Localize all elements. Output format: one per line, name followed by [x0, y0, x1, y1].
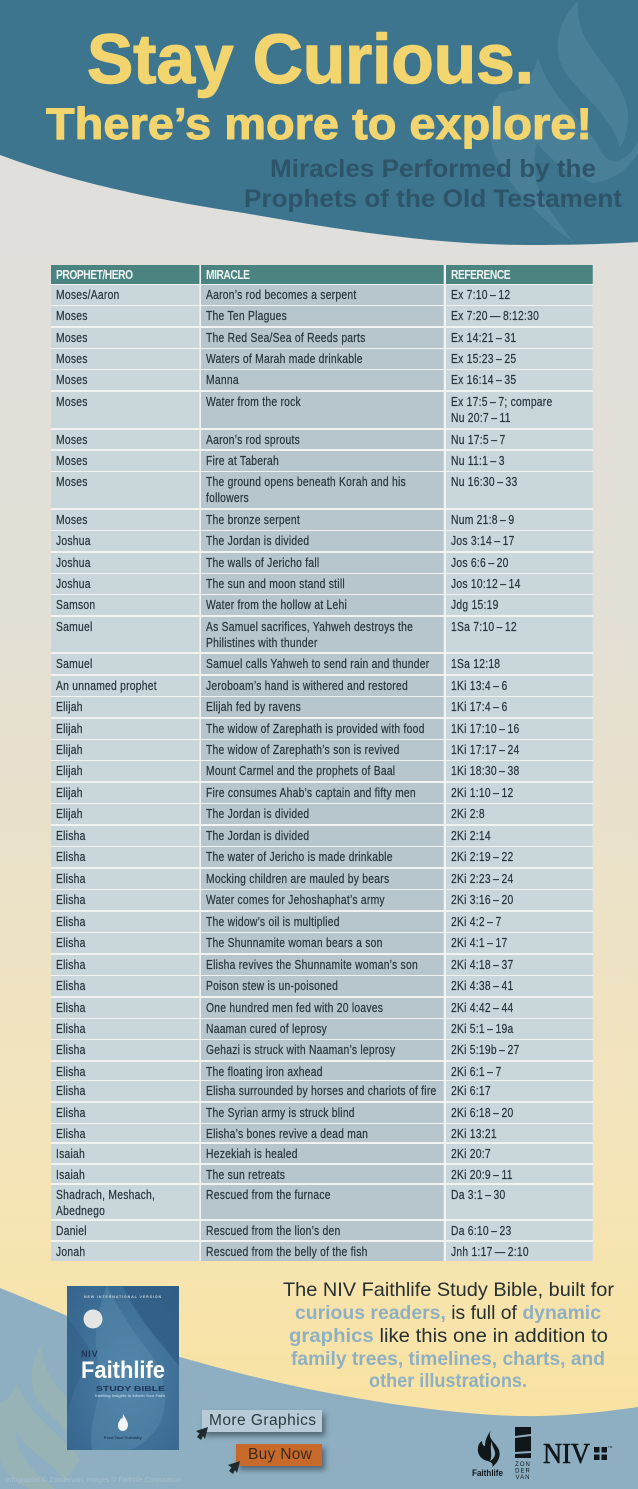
row 11: The Jordan is divided	[206, 534, 309, 548]
row 27: Elisha	[56, 893, 86, 907]
row 33: 2Ki 5:1 – 19a	[451, 1022, 513, 1036]
row 9: The ground opens beneath Korah and his	[206, 475, 406, 489]
row 39: 2Ki 20:7	[451, 1147, 491, 1161]
row 2: Moses	[56, 309, 88, 323]
Zondervan wordmark: ZON	[515, 1462, 531, 1468]
row 13: Jos 10:12 – 14	[451, 577, 521, 591]
row 34: Elisha	[56, 1043, 86, 1057]
seal	[84, 1310, 102, 1328]
row 12	[51, 553, 593, 573]
row 15	[51, 617, 593, 652]
row 17	[51, 676, 593, 696]
book flame	[118, 1414, 128, 1431]
row 15: Philistines with thunder	[206, 636, 318, 650]
title	[46, 20, 623, 213]
row 15: As Samuel sacrifices, Yahweh destroys the	[206, 620, 413, 634]
title: Miracles Performed by the	[270, 155, 596, 183]
publisher logos	[470, 1425, 638, 1485]
row 25: Elisha	[56, 850, 86, 864]
row 38	[51, 1124, 593, 1142]
icon: cursor arrows	[194, 1425, 244, 1477]
row 10: The bronze serpent	[206, 513, 300, 527]
row 41: Rescued from the furnace	[206, 1188, 331, 1202]
row 30: Elisha revives the Shunnamite woman’s son	[206, 958, 418, 972]
row 5: Manna	[206, 373, 239, 387]
book cover	[67, 1286, 179, 1450]
row 34: 2Ki 5:19b – 27	[451, 1043, 519, 1057]
row 38: 2Ki 13:21	[451, 1127, 497, 1141]
row 19	[51, 719, 593, 739]
row 32: Elisha	[56, 1001, 86, 1015]
row 14: Samson	[56, 598, 95, 612]
row 28: Elisha	[56, 915, 86, 929]
row 19: Elijah	[56, 722, 83, 736]
row 43: Jnh 1:17 — 2:10	[451, 1245, 529, 1259]
row 39	[51, 1144, 593, 1163]
promotional text: other illustrations.	[369, 1370, 527, 1392]
row 5	[51, 370, 593, 390]
row 4: Moses	[56, 352, 88, 366]
row 4: Waters of Marah made drinkable	[206, 352, 363, 366]
table header: PROPHET/HERO	[56, 268, 133, 282]
book cover: Faithlife	[81, 1357, 165, 1384]
row 16	[51, 654, 593, 674]
row 2	[51, 306, 593, 326]
row 7: Moses	[56, 433, 88, 447]
row 21: Mount Carmel and the prophets of Baal	[206, 764, 395, 778]
more graphics button: More Graphics	[209, 1412, 316, 1429]
publisher logos: VAN	[516, 1475, 530, 1481]
row 25: The water of Jericho is made drinkable	[206, 850, 393, 864]
row 20	[51, 740, 593, 760]
row 37: The Syrian army is struck blind	[206, 1106, 355, 1120]
row 6	[51, 392, 593, 428]
row 39: Isaiah	[56, 1147, 85, 1161]
row 35: The floating iron axhead	[206, 1065, 323, 1079]
more graphics button	[202, 1410, 322, 1432]
row 24: 2Ki 2:14	[451, 829, 491, 843]
title: Stay Curious.	[87, 20, 534, 98]
row 12: Jos 6:6 – 20	[451, 556, 509, 570]
row 16: Samuel	[56, 657, 92, 671]
row 19: The widow of Zarephath is provided with food	[206, 722, 425, 736]
row 35	[51, 1062, 593, 1080]
row 2: The Ten Plagues	[206, 309, 287, 323]
row 41: Abednego	[56, 1204, 105, 1218]
row 35: Elisha	[56, 1065, 86, 1079]
row 10: Moses	[56, 513, 88, 527]
row 12: The walls of Jericho fall	[206, 556, 319, 570]
title: There’s more to explore!	[46, 100, 592, 149]
icon: Faithlife flame	[478, 1430, 500, 1467]
promotional text	[270, 1275, 638, 1395]
row 36: Elisha	[56, 1084, 86, 1098]
row 32: One hundred men fed with 20 loaves	[206, 1001, 383, 1015]
row 11: Joshua	[56, 534, 91, 548]
row 7: Nu 17:5 – 7	[451, 433, 506, 447]
row 37	[51, 1103, 593, 1123]
row 24: Elisha	[56, 829, 86, 843]
row 23: 2Ki 2:8	[451, 807, 485, 821]
book cover: STUDY BIBLE	[96, 1384, 165, 1393]
row 10	[51, 510, 593, 530]
row 37: Elisha	[56, 1106, 86, 1120]
row 9: followers	[206, 491, 249, 505]
row 17: Jeroboam’s hand is withered and restored	[206, 679, 408, 693]
row 26: Elisha	[56, 872, 86, 886]
publisher logos: DER	[515, 1468, 531, 1474]
row 20: Elijah	[56, 743, 83, 757]
row 28: 2Ki 4:2 – 7	[451, 915, 501, 929]
icon: Zondervan block	[515, 1427, 531, 1458]
row 6: Water from the rock	[206, 395, 301, 409]
row 40: 2Ki 20:9 – 11	[451, 1168, 513, 1182]
row 24	[51, 826, 593, 846]
row 5: Moses	[56, 373, 88, 387]
row 36: Elisha surrounded by horses and chariots of fire	[206, 1084, 437, 1098]
row 28: The widow’s oil is multiplied	[206, 915, 340, 929]
row 29: Elisha	[56, 936, 86, 950]
table header: REFERENCE	[451, 268, 510, 282]
row 40	[51, 1165, 593, 1183]
row 18: 1Ki 17:4 – 6	[451, 700, 507, 714]
promotional text: The NIV Faithlife Study Bible, built for	[283, 1279, 615, 1301]
book cover: NIV	[81, 1349, 98, 1359]
row 23: The Jordan is divided	[206, 807, 309, 821]
row 5: Ex 16:14 – 35	[451, 373, 516, 387]
row 22: 2Ki 1:10 – 12	[451, 786, 513, 800]
row 17: An unnamed prophet	[56, 679, 157, 693]
row 16: Samuel calls Yahweh to send rain and thunder	[206, 657, 429, 671]
row 42: Daniel	[56, 1224, 87, 1238]
row 3: Moses	[56, 331, 88, 345]
row 3: The Red Sea/Sea of Reeds parts	[206, 331, 366, 345]
row 13: Joshua	[56, 577, 91, 591]
row 13: The sun and moon stand still	[206, 577, 345, 591]
row 26	[51, 869, 593, 889]
row 15: Samuel	[56, 620, 92, 634]
row 31	[51, 976, 593, 996]
row 1: Aaron’s rod becomes a serpent	[206, 288, 356, 302]
row 12: Joshua	[56, 556, 91, 570]
row 9: Moses	[56, 475, 88, 489]
row 13	[51, 574, 593, 594]
book cover: Instilling Insights to Inform Your Faith	[95, 1394, 165, 1398]
row 28	[51, 912, 593, 932]
row 26: 2Ki 2:23 – 24	[451, 872, 513, 886]
row 8	[51, 451, 593, 471]
row 1: Ex 7:10 – 12	[451, 288, 510, 302]
table header: MIRACLE	[206, 268, 250, 282]
row 7	[51, 430, 593, 449]
row 22: Fire consumes Ahab’s captain and fifty men	[206, 786, 416, 800]
table header	[51, 265, 593, 284]
row 23	[51, 804, 593, 824]
row 3: Ex 14:21 – 31	[451, 331, 516, 345]
row 7: Aaron’s rod sprouts	[206, 433, 300, 447]
row 20: The widow of Zarephath’s son is revived	[206, 743, 400, 757]
row 19: 1Ki 17:10 – 16	[451, 722, 519, 736]
publisher logos: TM	[608, 1445, 613, 1449]
row 16: 1Sa 12:18	[451, 657, 500, 671]
row 30: 2Ki 4:18 – 37	[451, 958, 513, 972]
row 25: 2Ki 2:19 – 22	[451, 850, 513, 864]
row 4	[51, 349, 593, 369]
row 31: 2Ki 4:38 – 41	[451, 979, 513, 993]
row 22	[51, 783, 593, 803]
row 34: Gehazi is struck with Naaman’s leprosy	[206, 1043, 395, 1057]
row 22: Elijah	[56, 786, 83, 800]
row 11	[51, 531, 593, 551]
row 18	[51, 697, 593, 717]
row 3	[51, 328, 593, 348]
credit line: infographic © Zondervan, images © Faithlife Corporation	[6, 1477, 181, 1484]
row 18: Elijah fed by ravens	[206, 700, 301, 714]
row 42	[51, 1221, 593, 1240]
row 33: Elisha	[56, 1022, 86, 1036]
row 30: Elisha	[56, 958, 86, 972]
row 10: Num 21:8 – 9	[451, 513, 514, 527]
row 17: 1Ki 13:4 – 6	[451, 679, 507, 693]
title: Prophets of the Old Testament	[244, 185, 623, 213]
row 36: 2Ki 6:17	[451, 1084, 491, 1098]
row 8: Nu 11:1 – 3	[451, 454, 505, 468]
book cover: Feed Your Curiosity	[104, 1435, 143, 1440]
row 8: Moses	[56, 454, 88, 468]
row 15: 1Sa 7:10 – 12	[451, 620, 517, 634]
row 27	[51, 890, 593, 910]
row 41: Shadrach, Meshach,	[56, 1188, 155, 1202]
row 31: Elisha	[56, 979, 86, 993]
row 38: Elisha’s bones revive a dead man	[206, 1127, 368, 1141]
buy now button	[236, 1444, 322, 1466]
row 14: Water from the hollow at Lehi	[206, 598, 347, 612]
row 18: Elijah	[56, 700, 83, 714]
row 11: Jos 3:14 – 17	[451, 534, 515, 548]
row 9	[51, 472, 593, 508]
table of miracles	[51, 265, 593, 1261]
promotional text: family trees, timelines, charts, and	[291, 1348, 605, 1370]
row 43: Rescued from the belly of the fish	[206, 1245, 368, 1259]
icon: NIV plus box	[594, 1447, 607, 1460]
promotional text: curious readers, is full of dynamic	[295, 1302, 601, 1324]
row 4: Ex 15:23 – 25	[451, 352, 516, 366]
row 9: Nu 16:30 – 33	[451, 475, 517, 489]
row 42: Rescued from the lion’s den	[206, 1224, 340, 1238]
row 6: Ex 17:5 – 7; compare	[451, 395, 552, 409]
row 33: Naaman cured of leprosy	[206, 1022, 327, 1036]
row 31: Poison stew is un-poisoned	[206, 979, 338, 993]
row 33	[51, 1019, 593, 1039]
row 43	[51, 1242, 593, 1261]
row 32: 2Ki 4:42 – 44	[451, 1001, 513, 1015]
row 29	[51, 933, 593, 953]
row 6: Moses	[56, 395, 88, 409]
row 27: Water comes for Jehoshaphat’s army	[206, 893, 385, 907]
row 14	[51, 595, 593, 615]
row 23: Elijah	[56, 807, 83, 821]
row 39: Hezekiah is healed	[206, 1147, 298, 1161]
row 35: 2Ki 6:1 – 7	[451, 1065, 501, 1079]
row 21: Elijah	[56, 764, 83, 778]
row 21	[51, 761, 593, 781]
row 20: 1Ki 17:17 – 24	[451, 743, 519, 757]
NIV wordmark: NIV	[543, 1438, 590, 1470]
row 38: Elisha	[56, 1127, 86, 1141]
row 40: Isaiah	[56, 1168, 85, 1182]
row 27: 2Ki 3:16 – 20	[451, 893, 513, 907]
row 29: The Shunnamite woman bears a son	[206, 936, 383, 950]
row 42: Da 6:10 – 23	[451, 1224, 511, 1238]
row 29: 2Ki 4:1 – 17	[451, 936, 507, 950]
row 40: The sun retreats	[206, 1168, 285, 1182]
row 26: Mocking children are mauled by bears	[206, 872, 389, 886]
row 1: Moses/Aaron	[56, 288, 120, 302]
row 6: Nu 20:7 – 11	[451, 411, 511, 425]
row 25	[51, 847, 593, 867]
row 21: 1Ki 18:30 – 38	[451, 764, 519, 778]
row 2: Ex 7:20 — 8:12:30	[451, 309, 539, 323]
row 32	[51, 998, 593, 1018]
row 1	[51, 285, 593, 305]
row 37: 2Ki 6:18 – 20	[451, 1106, 513, 1120]
Faithlife wordmark: Faithlife	[472, 1468, 503, 1479]
row 8: Fire at Taberah	[206, 454, 279, 468]
row 24: The Jordan is divided	[206, 829, 309, 843]
row 41	[51, 1185, 593, 1219]
row 43: Jonah	[56, 1245, 85, 1259]
promotional text: graphics like this one in addition to	[289, 1325, 608, 1347]
buy now button: Buy Now	[248, 1446, 312, 1463]
row 14: Jdg 15:19	[451, 598, 499, 612]
row 30	[51, 955, 593, 975]
row 41: Da 3:1 – 30	[451, 1188, 506, 1202]
row 36	[51, 1081, 593, 1101]
edition line: NEW INTERNATIONAL VERSION	[84, 1295, 162, 1299]
row 34	[51, 1040, 593, 1060]
